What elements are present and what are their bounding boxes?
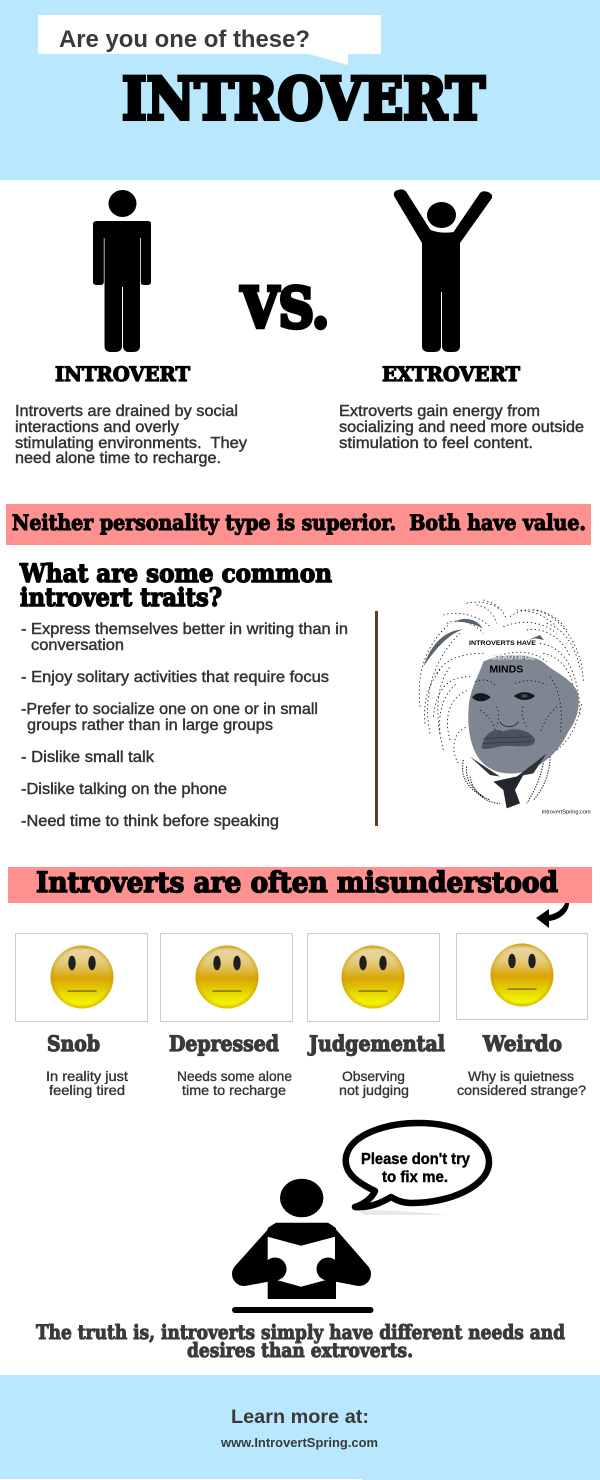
illustration: einstein portrait: BEAUTIFUL bbox=[492, 654, 535, 661]
traits list: - Dislike small talk bbox=[21, 749, 155, 766]
card: depressed: Needs some alone bbox=[177, 1068, 292, 1084]
traits heading bbox=[19, 559, 332, 612]
panel: header bbox=[0, 0, 600, 180]
illustration: einstein portrait: INTROVERTS HAVE bbox=[469, 640, 536, 647]
card: judgemental: Judgemental bbox=[307, 1031, 445, 1056]
traits heading: introvert traits? bbox=[20, 583, 222, 612]
panel: footer bbox=[0, 1375, 600, 1480]
speech bubble bbox=[38, 15, 381, 65]
traits list: -Need time to think before speaking bbox=[21, 813, 279, 830]
speech bubble: please don't try to fix me: to fix me. bbox=[382, 1169, 448, 1186]
card: depressed bbox=[160, 934, 292, 1098]
card: weirdo: Weirdo bbox=[482, 1031, 562, 1056]
traits list: groups rather than in large groups bbox=[27, 717, 273, 734]
traits list: - Enjoy solitary activities that require focus bbox=[21, 669, 329, 686]
card: snob: feeling tired bbox=[49, 1082, 125, 1098]
introvert description: stimulating environments. They bbox=[15, 435, 247, 452]
arrow bbox=[536, 903, 569, 928]
extrovert label: EXTROVERT bbox=[382, 362, 520, 386]
extrovert description: Extroverts gain energy from bbox=[339, 403, 540, 420]
closing statement: desires than extroverts. bbox=[187, 1339, 413, 1362]
card: judgemental: not judging bbox=[339, 1082, 409, 1098]
illustration: einstein portrait: MINDS bbox=[489, 664, 524, 675]
introvert description: interactions and overly bbox=[15, 419, 179, 436]
card: weirdo bbox=[456, 934, 588, 1098]
extrovert description bbox=[339, 403, 584, 452]
speech bubble: please don't try to fix me bbox=[346, 1123, 489, 1215]
icon: person reading bbox=[232, 1179, 374, 1313]
card: snob: Snob bbox=[47, 1031, 100, 1056]
banner: neither is superior bbox=[6, 504, 591, 545]
title: INTROVERT bbox=[122, 65, 485, 133]
footer url: www.IntrovertSpring.com bbox=[220, 1436, 378, 1450]
traits list: - Express themselves better in writing than in bbox=[21, 621, 348, 638]
extrovert description: socializing and need more outside bbox=[339, 419, 584, 436]
traits list bbox=[21, 621, 348, 830]
introvert description bbox=[15, 403, 247, 467]
card: depressed: Depressed bbox=[169, 1031, 279, 1056]
introvert label: INTROVERT bbox=[55, 362, 190, 386]
introvert description: Introverts are drained by social bbox=[15, 403, 238, 420]
card: snob bbox=[16, 934, 148, 1098]
card: snob: In reality just bbox=[46, 1068, 128, 1084]
traits list: conversation bbox=[31, 637, 124, 654]
traits list: -Prefer to socialize one on one or in small bbox=[21, 701, 318, 718]
extrovert description: stimulation to feel content. bbox=[339, 435, 533, 452]
banner: misunderstood: Introverts are often misunderstood bbox=[36, 866, 558, 899]
speech bubble: please don't try to fix me: Please don't try bbox=[361, 1151, 470, 1168]
vs label: VS. bbox=[240, 275, 329, 340]
card: judgemental: Observing bbox=[342, 1068, 405, 1084]
illustration: einstein portrait: IntrovertSpring.com bbox=[542, 809, 591, 815]
card: judgemental bbox=[307, 934, 445, 1098]
card: depressed: time to recharge bbox=[182, 1082, 286, 1098]
footer heading: Learn more at: bbox=[231, 1407, 369, 1428]
icon: extrovert figure bbox=[394, 189, 492, 352]
card: weirdo: Why is quietness bbox=[468, 1068, 574, 1084]
illustration: einstein portrait bbox=[419, 600, 591, 815]
introvert description: need alone time to recharge. bbox=[15, 450, 221, 467]
card: weirdo: considered strange? bbox=[457, 1082, 586, 1098]
panel: introvert vs extrovert bbox=[15, 189, 584, 467]
traits heading: What are some common bbox=[19, 559, 332, 588]
traits list: -Dislike talking on the phone bbox=[21, 781, 227, 798]
panel: common traits bbox=[19, 559, 591, 830]
question text: Are you one of these? bbox=[59, 26, 310, 53]
icon: introvert figure bbox=[93, 190, 151, 352]
closing statement bbox=[36, 1321, 565, 1362]
